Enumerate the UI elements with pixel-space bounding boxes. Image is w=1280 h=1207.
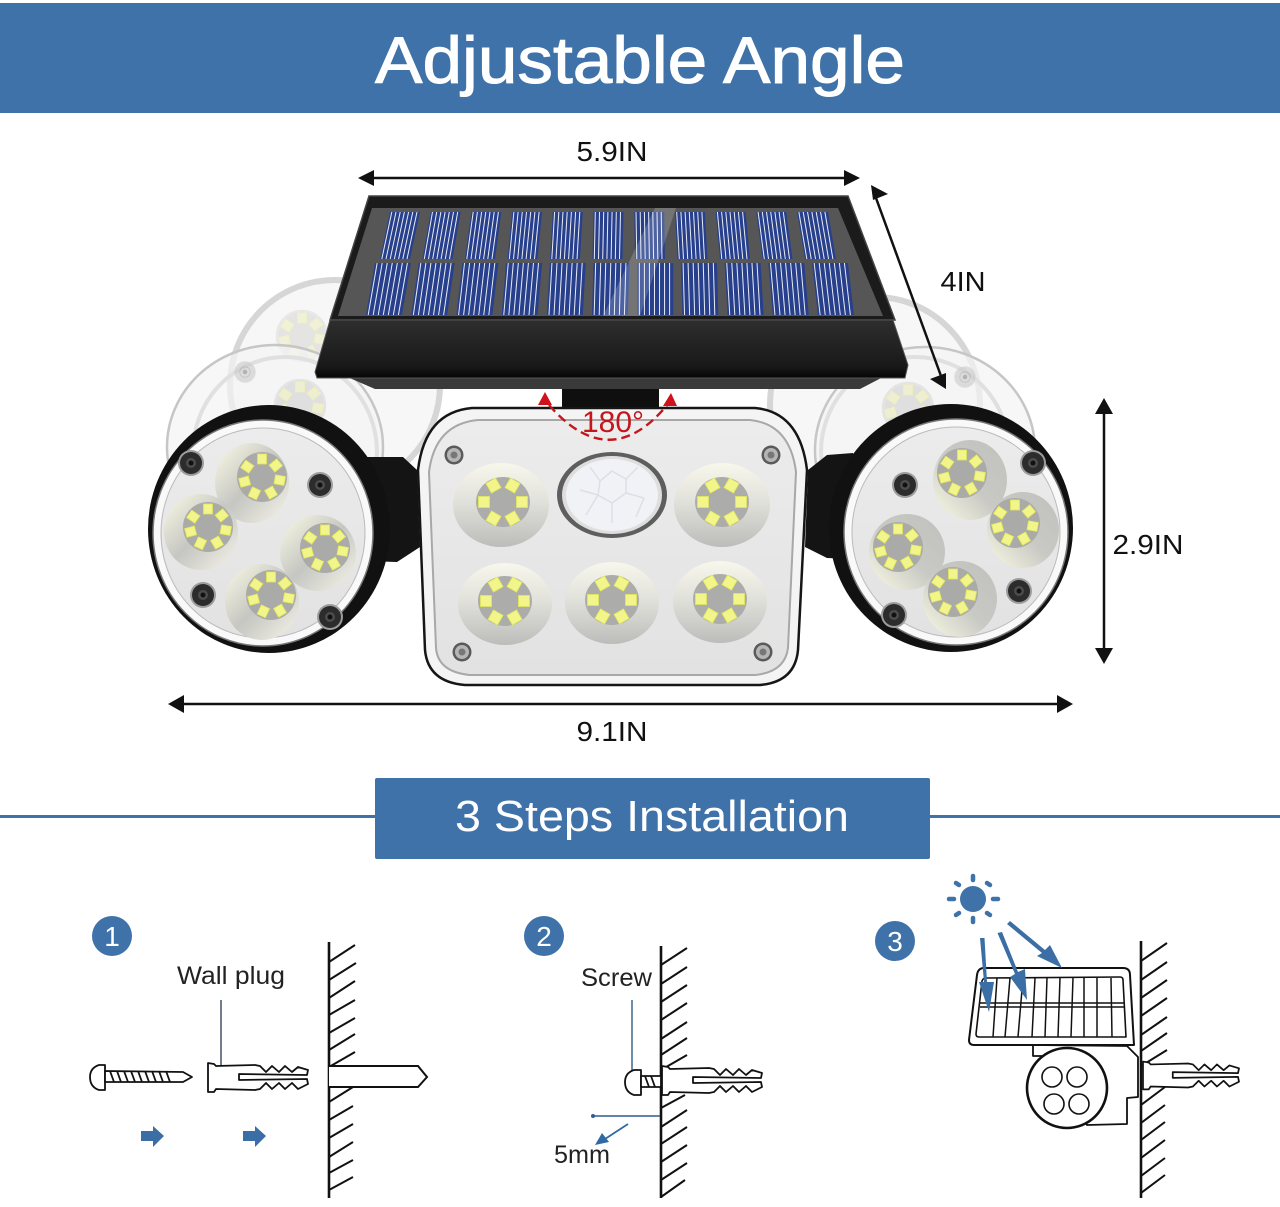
dimension: height: 2.9IN [1112, 529, 1184, 560]
right lamp head [829, 404, 1073, 652]
section heading: 3 steps installation [0, 778, 1280, 859]
solar panel outline [969, 968, 1134, 1045]
wall [661, 946, 687, 1198]
left lamp head [148, 405, 390, 653]
plug in wall [662, 1066, 762, 1095]
ghost lamp positions: right [770, 297, 1035, 553]
step number 3 [875, 921, 915, 961]
icon: sun [949, 876, 998, 922]
180 degree rotation marker [538, 392, 677, 440]
dimension: panel depth: 4IN [940, 266, 986, 297]
dimension: panel width: 5.9IN [576, 136, 648, 167]
glass reflection [603, 208, 676, 316]
step number 1: 1 [104, 921, 120, 952]
right bracket [805, 453, 880, 560]
step 3 [875, 876, 1239, 1198]
solar cells bottom row [366, 263, 854, 315]
step number 2: 2 [536, 921, 552, 952]
label: wall plug: Wall plug [177, 962, 285, 990]
section heading: 3 steps installation: 3 Steps Installation [455, 792, 849, 841]
5mm gap marker: 5mm [554, 1141, 610, 1169]
dimension: total width [168, 695, 1073, 747]
wall [1141, 941, 1167, 1198]
panel glass [338, 208, 883, 316]
arrow [243, 1126, 266, 1147]
sunlight arrow [998, 932, 1027, 1000]
panel top frame [330, 196, 895, 320]
wall plug [208, 1063, 308, 1092]
step 1 [90, 916, 427, 1198]
label: screw: Screw [581, 964, 653, 992]
step number 3: 3 [887, 926, 903, 957]
product: solar light [148, 196, 1073, 685]
centre LED housing [418, 408, 807, 685]
dimension: height [1095, 398, 1184, 664]
sunlight arrow [979, 938, 994, 1012]
dimension: total width: 9.1IN [576, 716, 648, 747]
dimension: panel depth [871, 185, 986, 389]
left bracket [340, 457, 420, 562]
solar cells top row [380, 212, 836, 259]
panel stem [562, 382, 659, 412]
plug in wall [1143, 1062, 1239, 1089]
arrow [141, 1126, 164, 1147]
step number 2 [524, 916, 564, 956]
step number 1 [92, 916, 132, 956]
180 degree rotation marker: 180° [582, 406, 644, 439]
ghost lamp positions: left [167, 280, 440, 549]
dimension: panel width [358, 136, 860, 186]
panel underside [345, 376, 885, 389]
wall plug leader line [220, 1000, 222, 1072]
title: Adjustable Angle [375, 23, 905, 97]
lamp head [1027, 1048, 1107, 1128]
screw in plug [625, 1070, 661, 1095]
panel front edge [315, 320, 908, 378]
5mm gap marker [554, 1114, 660, 1169]
screw leader line [631, 1000, 633, 1072]
sunlight arrow [1007, 921, 1062, 968]
motion sensor [557, 452, 667, 538]
solar light line drawing [969, 968, 1138, 1128]
header banner [0, 3, 1280, 113]
wall with drilled hole [329, 942, 427, 1198]
screw [90, 1065, 192, 1090]
step 2 [524, 916, 762, 1198]
solar panel [315, 196, 908, 389]
housing [1033, 1045, 1138, 1125]
